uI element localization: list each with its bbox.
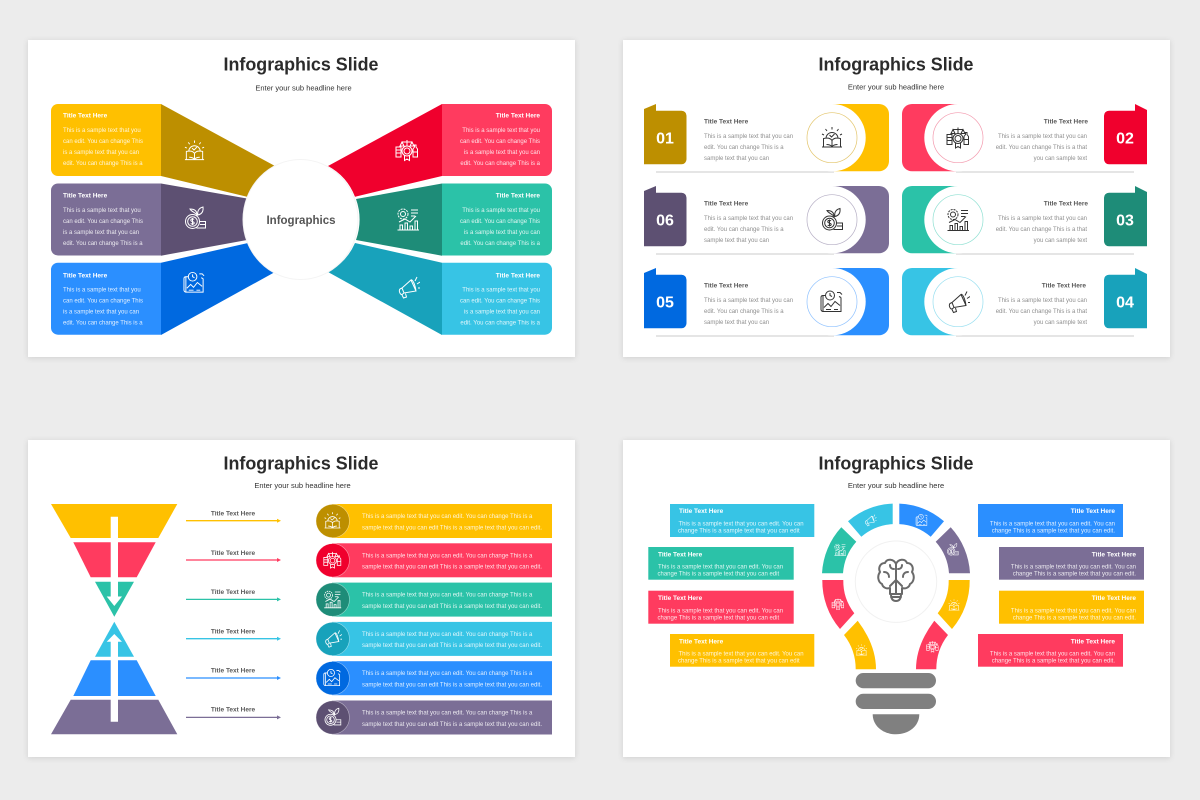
body text: you can sample text [1034,320,1087,326]
body text: This is a sample text that you [63,208,141,214]
body text: edit. You can change This is a [63,321,143,327]
body text: change This is a sample text that you can edit. [992,659,1115,665]
body text: This is a sample text that you can [998,216,1087,222]
body text: edit. You can change This is a that [996,145,1087,151]
bar 4 [316,622,552,656]
row 4 label and arrow: Title Text Here [211,628,255,635]
body text: is a sample text that you can [63,310,139,316]
body text: can edit. You can change This [63,219,143,225]
sub headline: Enter your sub headline here [848,82,944,92]
light bulb diagram [822,504,970,734]
hourglass diagram [51,504,177,734]
icon: coin plant [186,207,206,228]
body text: you can sample text [1034,238,1087,244]
title: Title Text Here [496,272,540,279]
card 04 [902,268,1147,337]
body text: can edit. You can change This [460,298,540,304]
bar 5 [316,661,552,695]
bar 2 [316,543,552,577]
bar text: This is a sample text that you can edit. You can change This is a [362,514,533,520]
bar text: sample text that you can edit This is a sample text that you can edit. [362,682,542,688]
number tab: 04 [1116,294,1134,312]
heading: Infographics Slide [224,54,378,74]
bar text: sample text that you can edit This is a sample text that you can edit. [362,643,542,649]
icon: book [325,512,340,528]
icon: coin plant [325,708,341,725]
body text: edit. You can change This is a [704,227,784,233]
arrow: down [107,517,122,606]
row 3 label and arrow: Title Text Here [211,589,255,596]
row 3 label and arrow [186,589,281,601]
bar text: This is a sample text that you can edit. You can change This is a [362,632,533,638]
body text: This is a sample text that you [462,208,540,214]
bulb segment: teal [822,527,856,573]
body text: This is a sample text that you can edit. You can [658,608,783,614]
left segment: blue [51,243,275,335]
body text: edit. You can change This is a [704,145,784,151]
bulb segment: red left [822,580,854,629]
body text: This is a sample text that you can edit. You can [1011,608,1136,614]
icon: book [185,140,204,160]
row 2 label and arrow: Title Text Here [211,550,255,557]
center circle [243,160,358,280]
body text: This is a sample text that you [462,128,540,134]
icon: award [324,552,341,568]
body text: This is a sample text that you can edit. You can [990,522,1115,528]
title: Title Text Here [496,193,540,200]
title: Title Text Here [1092,552,1136,558]
body text: can edit. You can change This [63,139,143,145]
body text: is a sample text that you can [464,150,540,156]
icon: map chart [821,291,842,312]
body text: This is a sample text that you can [704,134,793,140]
card 01 [644,104,889,173]
body text: This is a sample text that you can edit. You can [990,652,1115,658]
title: Title Text Here [63,272,108,279]
body text: change This is a sample text that you can edit. [992,529,1115,535]
body text: This is a sample text that you can edit. You can [678,652,804,658]
left box: yellow [670,634,814,667]
body text: edit. You can change This is a [460,241,541,247]
body text: edit. You can change This is a that [996,309,1087,315]
row 5 label and arrow: Title Text Here [211,667,255,674]
sub headline: Enter your sub headline here [848,481,944,490]
body text: you can sample text [1034,156,1087,162]
body text: can edit. You can change This [63,298,143,304]
row 1 label and arrow: Title Text Here [211,510,255,518]
left box: red [648,591,794,624]
body text: This is a sample text that you can [998,134,1087,140]
row 4 label and arrow [186,628,281,641]
left segment: yellow [51,104,275,197]
bar text: This is a sample text that you can edit. You can change This is a [362,671,533,677]
icon: megaphone [949,292,970,312]
number tab [644,268,686,328]
bar text: sample text that you can edit This is a sample text that you can edit. [362,722,542,728]
number tab: 05 [656,294,674,312]
body text: edit. You can change This is a [460,161,541,167]
left box: cyan [670,504,814,537]
bulb segment: purple [936,527,970,573]
title: Title Text Here [63,193,108,200]
title: Title Text Here [679,638,724,646]
row 6 label and arrow [186,706,281,719]
title: Title Text Here [1071,508,1115,515]
panel: numbered cards slide [623,40,1170,357]
body text: change This is a sample text that you can edit. [1013,572,1136,578]
title: Title Text Here [496,113,540,120]
icon: award [396,140,418,160]
body text: edit. You can change This is a [63,161,143,167]
title: Title Text Here [704,119,749,126]
title: Title Text Here [679,508,724,515]
title: Title Text Here [658,552,703,558]
heading: Infographics Slide [224,452,378,474]
right box: yellow [999,591,1144,624]
bulb segment: red right [916,621,948,669]
body text: edit. You can change This is a [704,309,784,315]
bar text: sample text that you can edit This is a sample text that you can edit. [362,525,542,531]
icon: gear chart [324,591,341,608]
body text: sample text that you can [704,238,769,244]
panel: hourglass slide [28,440,575,757]
right box: red [978,634,1123,667]
bar 6 [316,700,552,734]
body text: This is a sample text that you can [704,216,793,222]
right segment: teal [356,184,552,256]
icon: book [822,127,842,147]
icon: coin plant [822,208,842,230]
icon: megaphone [399,277,420,298]
bulb segment: cyan [848,504,893,537]
number tab [1104,186,1147,246]
title: Title Text Here [1092,595,1136,602]
body text: change This is a sample text that you can edit. [1013,616,1136,622]
card 05 [644,268,889,337]
title: Title Text Here [1071,638,1115,646]
body text: This is a sample text that you can [704,298,793,304]
bar text: This is a sample text that you can edit. You can change This is a [362,593,533,599]
bulb segment: yellow left [844,621,876,669]
icon: megaphone [326,630,342,647]
body text: is a sample text that you can [464,230,540,236]
left segment: purple [51,184,247,256]
arrow: up [107,634,122,722]
body text: can edit. You can change This [460,139,540,145]
title: Title Text Here [704,283,749,290]
row 1 label and arrow [186,510,281,523]
card 03 [902,186,1147,255]
body text: This is a sample text that you [63,287,141,293]
body text: This is a sample text that you can [998,298,1087,304]
bar text: sample text that you can edit This is a sample text that you can edit. [362,604,542,610]
left box: teal [648,547,794,580]
body text: can edit. You can change This [460,219,540,225]
body text: sample text that you can [704,156,769,162]
bar text: sample text that you can edit This is a sample text that you can edit. [362,565,542,571]
right segment: cyan [328,243,552,335]
number tab [644,104,686,164]
bulb segment: blue [899,504,944,537]
title: Title Text Here [1042,283,1086,290]
right box: blue [978,504,1123,537]
heading: Infographics Slide [818,452,974,474]
number tab: 06 [656,212,674,230]
body text: is a sample text that you can [63,150,139,156]
number tab: 03 [1116,212,1134,230]
bar text: This is a sample text that you can edit. You can change This is a [362,710,533,716]
right box: purple [999,547,1144,580]
row 5 label and arrow [186,667,281,680]
card 06 [644,186,889,255]
heading: Infographics Slide [818,54,974,74]
bar text: This is a sample text that you can edit. You can change This is a [362,553,533,559]
icon: brain [878,560,914,601]
body text: This is a sample text that you can edit. You can [678,522,804,528]
body text: This is a sample text that you can edit. You can [1011,564,1136,570]
title: Title Text Here [1044,201,1088,208]
body text: change This is a sample text that you can edit [658,572,779,578]
title: Title Text Here [63,113,108,120]
panel: light bulb slide [623,440,1170,757]
center label: Infographics [266,215,336,227]
body text: edit. You can change This is a that [996,227,1087,233]
body text: edit. You can change This is a [460,321,541,327]
title: Title Text Here [1044,119,1088,126]
body text: sample text that you can [704,320,769,326]
icon: gear chart [398,209,419,230]
body text: change This is a sample text that you can edit [678,529,800,535]
body text: change This is a sample text that you can edit [678,659,800,665]
sub headline: Enter your sub headline here [255,84,352,92]
title: Title Text Here [704,201,749,208]
body text: edit. You can change This is a [63,241,143,247]
icon: map chart [324,669,340,686]
icon: award [947,128,968,148]
number tab [1104,268,1147,328]
sub headline: Enter your sub headline here [254,481,351,490]
body text: change This is a sample text that you can edit [658,616,779,622]
row 6 label and arrow: Title Text Here [211,706,255,714]
card 02 [902,104,1147,173]
bulb segment: yellow right [938,580,970,629]
body text: This is a sample text that you can edit. You can [658,564,783,570]
body text: This is a sample text that you [462,287,540,293]
bulb base [856,673,936,734]
bar 3 [316,583,552,617]
icon: map chart [184,272,204,292]
panel: radial fan slide [28,40,575,357]
right segment: red [328,104,552,197]
number tab [1104,104,1147,164]
number tab: 02 [1116,130,1134,148]
bar 1 [316,504,552,538]
inner circle [855,541,937,622]
title: Title Text Here [658,595,703,602]
number tab: 01 [656,130,674,148]
body text: is a sample text that you can [464,310,540,316]
row 2 label and arrow [186,550,281,562]
number tab [644,186,686,246]
body text: is a sample text that you can [63,230,139,236]
body text: This is a sample text that you [63,128,141,134]
icon: gear chart [948,210,969,230]
